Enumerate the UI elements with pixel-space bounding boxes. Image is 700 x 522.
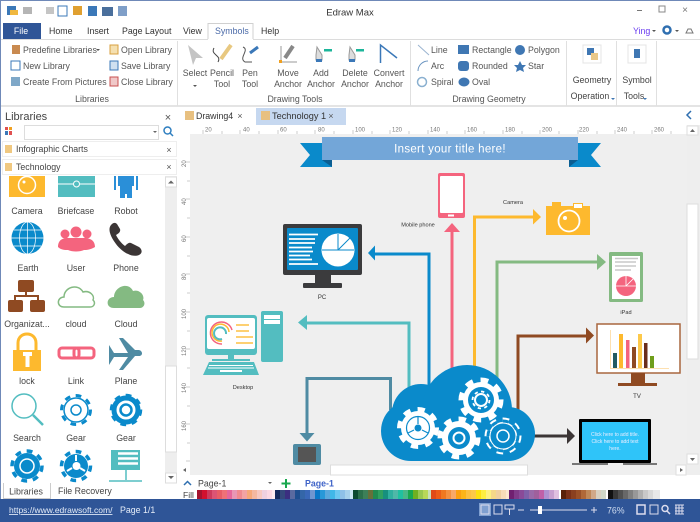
sidebar heading: [5, 111, 171, 124]
left ruler and top ruler: 60: [182, 235, 188, 242]
ribbon tabs: View: [183, 26, 203, 36]
ribbon group: symbol tools: Tools: [624, 91, 645, 101]
icon: laptop: [572, 419, 657, 465]
gear: right outline: [487, 420, 519, 452]
ribbon group: drawing tools: Move: [277, 68, 299, 78]
library row: infographic charts: ×: [166, 145, 172, 155]
symbol: cloud solid: Cloud: [114, 319, 138, 329]
icon: TV chart: [597, 324, 680, 400]
ribbon tabs: Page Layout: [122, 26, 172, 36]
left ruler and top ruler: 140: [430, 128, 441, 134]
symbol: server: [109, 450, 142, 481]
arrow: to desktop: [298, 315, 409, 392]
ribbon tabs: Ying: [633, 26, 650, 36]
status bar: https://www.edrawsoft.com/: [9, 505, 113, 515]
sidebar heading: Libraries: [5, 111, 48, 123]
ribbon group: drawing tools: Anchor: [307, 79, 335, 89]
document tabs: Drawing4: [196, 111, 233, 121]
ribbon group: drawing geometry: Spiral: [431, 77, 454, 87]
icon: laptop: Click here to add title.: [591, 432, 639, 438]
left ruler and top ruler: 40: [182, 198, 188, 205]
library row: infographic charts: [2, 142, 176, 156]
ribbon group: geometry operation: Operation: [571, 91, 609, 101]
ribbon tabs: Insert: [87, 26, 110, 36]
sidebar search: [5, 126, 173, 140]
symbol: link: [59, 348, 94, 386]
ribbon tabs: [3, 23, 693, 40]
symbol: gear solid: [112, 396, 140, 443]
ribbon group: drawing tools: Add: [313, 68, 329, 78]
left ruler and top ruler: 200: [542, 128, 553, 134]
left ruler and top ruler: 260: [654, 128, 665, 134]
library row: technology: ×: [166, 162, 172, 172]
icon: iPad: [609, 252, 643, 316]
library row: technology: [2, 160, 176, 174]
document tabs: [180, 107, 700, 125]
gear: middle: [440, 419, 478, 457]
arrow: to TV: [518, 328, 594, 410]
ribbon tabs: Home: [49, 26, 73, 36]
symbol: gear outline: Gear: [66, 433, 86, 443]
ribbon group: libraries: New Library: [23, 61, 71, 71]
ribbon group: drawing tools: Select: [183, 68, 208, 78]
ribbon group: drawing geometry: Star: [528, 61, 544, 71]
icon: desktop computer: [203, 311, 283, 391]
ribbon group: drawing geometry: Rectangle: [472, 45, 512, 55]
status bar: 76%: [607, 506, 625, 516]
left ruler and top ruler: [180, 125, 700, 475]
ribbon tabs: File: [14, 26, 28, 36]
document tabs: ×: [237, 111, 243, 121]
symbol: briefcase: [58, 176, 95, 216]
library row: technology: Technology: [16, 162, 61, 172]
icon: PC: PC: [318, 295, 327, 301]
ribbon group: geometry operation: Geometry: [573, 75, 612, 85]
symbol: gear outline: [62, 396, 90, 443]
panel: libraries sidebar: [0, 0, 178, 499]
symbol: lock: [13, 334, 41, 386]
gear: top: [461, 380, 501, 420]
ribbon group: drawing tools: Anchor: [375, 79, 403, 89]
left ruler and top ruler: 220: [579, 128, 590, 134]
left ruler and top ruler: 20: [205, 128, 212, 134]
title bar: ×: [682, 5, 688, 16]
icon: laptop: Click here to add text: [592, 439, 639, 445]
ribbon group: symbol tools: Symbol: [622, 75, 652, 85]
symbol: user: User: [67, 263, 85, 273]
fill colour palette: [183, 490, 660, 500]
ribbon group: libraries: Close Library: [121, 77, 173, 87]
ribbon group: drawing tools: Anchor: [274, 79, 302, 89]
canvas scrollbars: [181, 125, 700, 475]
connector arrows: [298, 209, 606, 444]
sidebar scrollbar: [165, 176, 177, 483]
left ruler and top ruler: 160: [467, 128, 478, 134]
arrow: to iPad: [497, 254, 606, 380]
left ruler and top ruler: 20: [182, 160, 188, 167]
ribbon tabs: Help: [261, 26, 279, 36]
left ruler and top ruler: 120: [182, 345, 188, 356]
left ruler and top ruler: 100: [182, 308, 188, 319]
library row: infographic charts: Infographic Charts: [16, 144, 88, 154]
symbol: file recovery: File Recovery: [58, 486, 112, 496]
symbol: briefcase: Briefcase: [58, 206, 94, 216]
ribbon group: libraries: Save Library: [121, 61, 171, 71]
ribbon group: drawing geometry: [418, 45, 560, 104]
symbol: file recovery: [58, 452, 112, 496]
ribbon group: drawing geometry: Drawing Geometry: [452, 94, 526, 104]
ribbon group: libraries: Predefine Libraries: [23, 45, 97, 55]
left ruler and top ruler: 80: [318, 128, 325, 134]
symbol: plane: [109, 338, 142, 386]
symbol: organization: [4, 280, 50, 329]
title bar: [0, 0, 700, 22]
ribbon group: drawing geometry: Rounded: [472, 61, 508, 71]
arrow: to mobile phone: [444, 223, 460, 375]
icon: iPad: iPad: [620, 310, 632, 316]
symbol: phone: Phone: [113, 263, 139, 273]
gear: left: [400, 410, 436, 446]
page tabs bar: Page-1: [305, 478, 334, 488]
symbol: earth: [12, 222, 44, 273]
icon: desktop computer: Desktop: [233, 385, 253, 391]
symbol: organization: Organizat...: [4, 319, 50, 329]
left ruler and top ruler: 240: [617, 128, 628, 134]
left ruler and top ruler: 80: [182, 273, 188, 280]
ribbon group: libraries: [11, 45, 173, 104]
ribbon group: drawing geometry: Oval: [472, 77, 490, 87]
ribbon group: drawing geometry: Line: [431, 45, 448, 55]
fill colour palette: Fill: [183, 490, 194, 500]
symbol: camera: [9, 176, 45, 216]
ribbon group: drawing tools: Convert: [374, 68, 405, 78]
icon: mobile phone: Mobile phone: [401, 222, 435, 228]
cloud with gears: [381, 365, 535, 461]
libraries tab: Libraries: [9, 486, 43, 496]
left ruler and top ruler: 180: [505, 128, 516, 134]
arrow: to camera: [474, 209, 541, 375]
arrow: to PC: [368, 246, 429, 390]
sidebar heading: ×: [165, 112, 171, 124]
ribbon group: drawing tools: Tool: [242, 79, 258, 89]
icon: mobile phone: [401, 173, 465, 228]
icon: storage device: [293, 444, 321, 465]
ribbon group: drawing tools: Delete: [342, 68, 368, 78]
ribbon group: drawing tools: Pen: [242, 68, 258, 78]
symbol: camera: Camera: [11, 206, 43, 216]
left ruler and top ruler: 160: [182, 420, 188, 431]
left ruler and top ruler: 40: [243, 128, 250, 134]
ribbon group: drawing tools: [183, 45, 405, 104]
canvas background: [190, 134, 687, 475]
symbol: plane: Plane: [115, 376, 137, 386]
symbol: phone: [109, 223, 142, 273]
libraries tab: [4, 483, 50, 498]
ribbon tabs: Symbols: [215, 26, 249, 36]
symbol: search: [12, 394, 43, 443]
ribbon: [0, 39, 700, 107]
symbol: gear solid: Gear: [116, 433, 136, 443]
ribbon group: libraries: Create From Pictures: [23, 77, 107, 87]
symbol: cloud solid: [108, 286, 144, 329]
banner title: [300, 137, 601, 167]
ribbon group: libraries: Open Library: [121, 45, 172, 55]
symbol: lock: lock: [19, 376, 35, 386]
ribbon group: drawing tools: Tool: [214, 79, 230, 89]
symbol: robot: [114, 176, 138, 216]
page tabs bar: Page-1: [198, 478, 226, 488]
left ruler and top ruler: 60: [280, 128, 287, 134]
ribbon group: libraries: Libraries: [75, 94, 109, 104]
ribbon group: geometry operation: [571, 45, 615, 101]
arrow: to laptop: [530, 428, 575, 444]
status bar: [0, 499, 700, 522]
icon: camera: [503, 200, 590, 235]
left ruler and top ruler: 100: [355, 128, 366, 134]
ribbon group: drawing geometry: Polygon: [528, 45, 560, 55]
icon: TV chart: TV: [633, 394, 641, 400]
status bar: Page 1/1: [120, 505, 155, 515]
symbol: search: Search: [13, 433, 41, 443]
ribbon group: drawing geometry: Arc: [431, 61, 445, 71]
ribbon group: drawing tools: Drawing Tools: [267, 94, 323, 104]
symbol: cloud outline: [58, 287, 94, 329]
title bar: Edraw Max: [326, 8, 374, 18]
ribbon group: drawing tools: Pencil: [210, 68, 234, 78]
symbol: earth: Earth: [17, 263, 39, 273]
document tabs: Technology 1: [272, 111, 326, 121]
symbol: user: [58, 226, 95, 273]
page tabs bar: [184, 478, 334, 488]
symbol: robot: Robot: [114, 206, 138, 216]
symbol: gear: [12, 451, 42, 481]
symbol: cloud outline: cloud: [65, 319, 87, 329]
left ruler and top ruler: 120: [392, 128, 403, 134]
banner title: Insert your title here!: [394, 144, 506, 156]
ribbon group: symbol tools: [622, 45, 652, 101]
left ruler and top ruler: 140: [182, 382, 188, 393]
symbol: link: Link: [68, 376, 85, 386]
ribbon group: drawing tools: Anchor: [341, 79, 369, 89]
document tabs: ×: [328, 111, 334, 121]
icon: camera: Camera: [503, 200, 524, 206]
icon: laptop: here.: [609, 446, 621, 452]
arrow: to storage device: [300, 378, 390, 442]
icon: PC: [283, 224, 362, 301]
